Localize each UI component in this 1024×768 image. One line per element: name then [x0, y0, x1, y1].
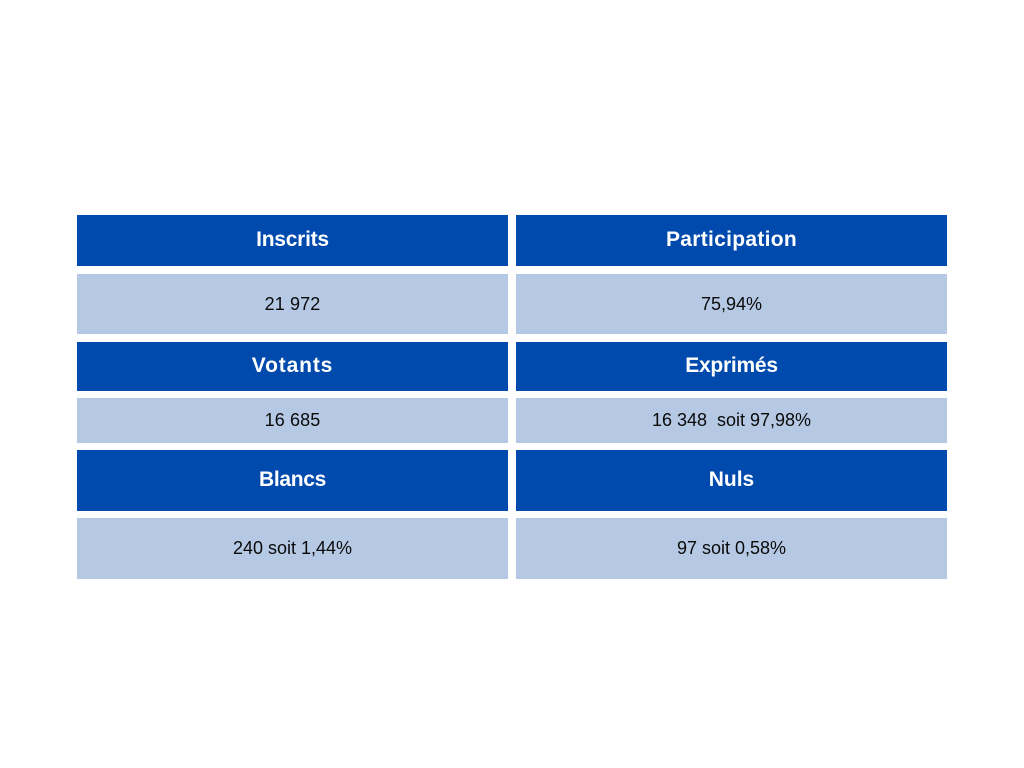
header: Exprimés: Exprimés: [685, 354, 778, 376]
value: Inscrits: 21 972: [265, 294, 320, 314]
value: Participation: 75,94%: [701, 294, 762, 314]
value: Blancs: 240 soit 1,44%: [233, 538, 352, 558]
header: Nuls: [516, 450, 947, 511]
value: Inscrits: [77, 274, 508, 334]
header: Inscrits: Inscrits: [256, 228, 329, 250]
header: Nuls: Nuls: [709, 468, 754, 490]
value: Votants: [77, 398, 508, 443]
value: Participation: [516, 274, 947, 334]
header: Blancs: Blancs: [259, 468, 326, 490]
header: Votants: Votants: [252, 354, 333, 376]
value: Exprimés: 16 348 soit 97,98%: [652, 410, 811, 430]
header: Blancs: [77, 450, 508, 511]
header: Participation: Participation: [666, 228, 797, 250]
value: Nuls: [516, 518, 947, 579]
value: Votants: 16 685: [265, 410, 320, 430]
header: Participation: [516, 215, 947, 266]
value: Blancs: [77, 518, 508, 579]
header: Exprimés: [516, 342, 947, 391]
value: Nuls: 97 soit 0,58%: [677, 538, 786, 558]
value: Exprimés: [516, 398, 947, 443]
header: Votants: [77, 342, 508, 391]
header: Inscrits: [77, 215, 508, 266]
